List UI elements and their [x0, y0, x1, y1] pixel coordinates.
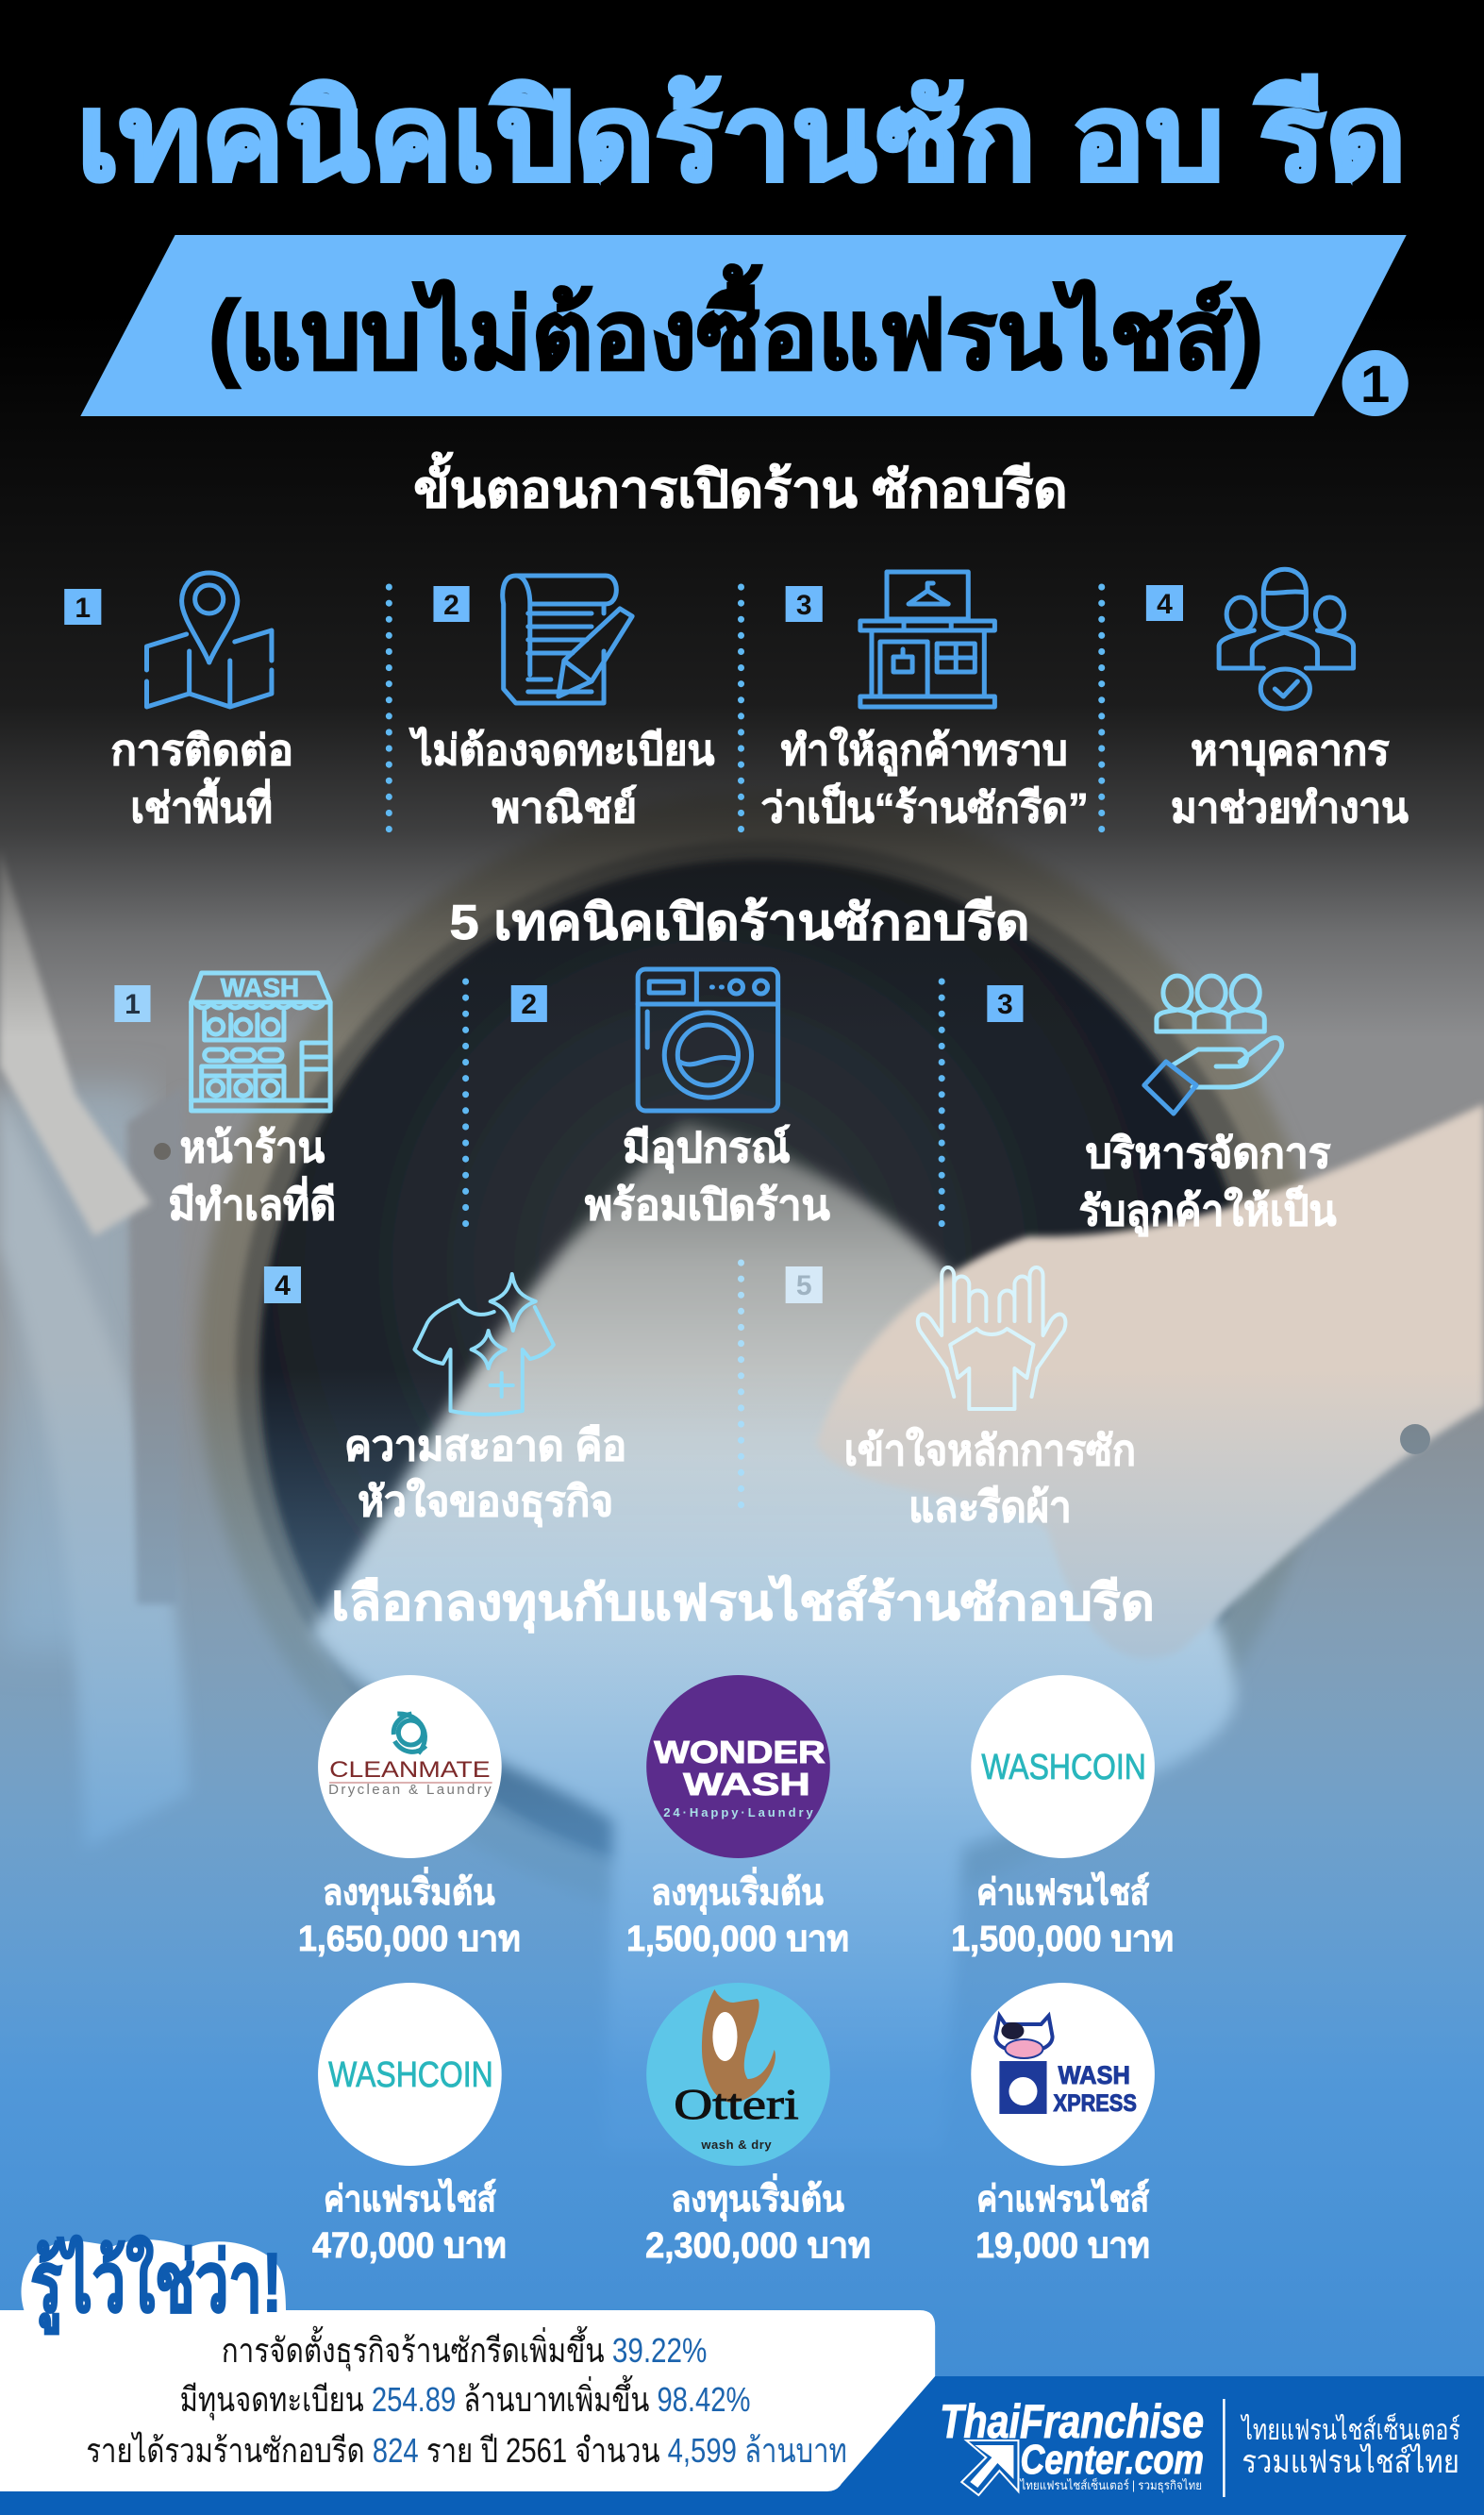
step 3: ว่าเป็น“ร้านซักรีด” — [761, 782, 1089, 831]
dark top overlay — [0, 0, 1484, 1038]
technique 3 — [987, 976, 1337, 1236]
heading: franchise options: เลือกลงทุนกับแฟรนไชส์ร้านซักอบรีด — [331, 1574, 1155, 1634]
franchise: Otteri: ลงทุนเริ่มต้น — [671, 2173, 844, 2222]
logo: ThaiFranchise Center: Center.com — [1020, 2437, 1204, 2483]
step 1: เช่าพื้นที่ — [130, 777, 273, 831]
franchise: Wash Xpress: ค่าแฟรนไชส์ — [976, 2177, 1150, 2220]
icon: washing machine — [638, 969, 778, 1111]
blue bottom overlay — [0, 1368, 1484, 2515]
technique 2: มีอุปกรณ์ — [623, 1124, 791, 1174]
technique 1: WASH — [221, 973, 299, 1002]
franchise: Cleanmate — [298, 1675, 521, 1959]
icon: staff group — [1219, 569, 1354, 709]
icon: document and pen — [503, 576, 632, 703]
franchise: Otteri — [645, 1983, 871, 2266]
technique 1: มีทำเลที่ดี — [169, 1176, 336, 1229]
part number badge — [1342, 350, 1409, 416]
step 3 — [761, 572, 1089, 831]
part number badge: 1 — [1360, 354, 1390, 413]
technique 5: 5 — [796, 1270, 812, 1301]
subtitle band: (แบบไม่ต้องซื้อแฟรนไชส์) — [208, 264, 1263, 389]
icon: shop with hanger — [860, 572, 994, 707]
title: เทคนิคเปิดร้านซัก อบ รีด — [76, 71, 1407, 206]
franchise: Cleanmate: 1,650,000 บาท — [298, 1920, 521, 1959]
franchise: Washcoin 2 — [312, 1983, 507, 2266]
technique 3: รับลูกค้าให้เป็น — [1079, 1185, 1337, 1236]
franchise: Washcoin: WASHCOIN — [981, 1748, 1146, 1787]
technique 1 — [114, 973, 336, 1229]
icon: hands and shirt — [918, 1267, 1065, 1409]
callout heading: รู้ไว้ใช่ว่า! — [30, 2235, 282, 2335]
franchise: Washcoin — [951, 1675, 1174, 1959]
franchise: Washcoin 2: WASHCOIN — [328, 2055, 493, 2095]
panel: opening steps — [64, 569, 1409, 831]
franchise: Otteri: 2,300,000 บาท — [645, 2226, 871, 2266]
step 4: มาช่วยทำงาน — [1171, 785, 1409, 831]
footer tagline — [1241, 2412, 1460, 2480]
franchise: Wash Xpress: XPRESS — [1054, 2090, 1137, 2117]
franchise: Wonder Wash: 1,500,000 บาท — [626, 1920, 849, 1959]
logo: ThaiFranchise Center: ไทยแฟรนไชส์เซ็นเตอร์ | รวมธุรกิจไทย — [1020, 2476, 1202, 2493]
franchise: Washcoin: 1,500,000 บาท — [951, 1920, 1174, 1959]
callout facts: การจัดตั้งธุรกิจร้านซักรีดเพิ่มขึ้น 39.22% — [222, 2325, 707, 2372]
franchise: Washcoin 2: ค่าแฟรนไชส์ — [324, 2177, 496, 2220]
franchise: Otteri: Otteri — [674, 2080, 799, 2128]
franchise: Cleanmate: Dryclean & Laundry — [328, 1782, 492, 1798]
franchise: Cleanmate: ลงทุนเริ่มต้น — [323, 1867, 495, 1915]
technique 3: บริหารจัดการ — [1086, 1131, 1331, 1177]
callout facts: มีทุนจดทะเบียน 254.89 ล้านบาทเพิ่มขึ้น 98.42% — [180, 2374, 751, 2421]
callout facts: รายได้รวมร้านซักอบรีด 824 ราย ปี 2561 จำนวน 4,599 ล้านบาท — [86, 2431, 847, 2470]
icon: map with pin — [146, 573, 272, 707]
technique 4: ความสะอาด คือ — [344, 1423, 626, 1469]
technique 2: 2 — [521, 989, 537, 1020]
franchise: Wonder Wash — [626, 1675, 849, 1959]
logo: ThaiFranchise Center — [940, 2395, 1204, 2495]
callout: did you know — [0, 2235, 935, 2491]
technique 4: 4 — [275, 1270, 291, 1301]
franchise: Washcoin: ค่าแฟรนไชส์ — [976, 1870, 1150, 1913]
step 2: 2 — [443, 590, 459, 621]
technique 5: เข้าใจหลักการซัก — [844, 1426, 1136, 1474]
footer bar — [0, 2376, 1484, 2515]
franchise: Wash Xpress — [971, 1983, 1155, 2266]
franchise: Cleanmate: CLEANMATE — [329, 1757, 491, 1783]
technique 3: 3 — [997, 989, 1013, 1020]
step 4 — [1146, 569, 1409, 831]
icon: hand holding customers — [1144, 976, 1282, 1114]
franchise: Wonder Wash: ลงทุนเริ่มต้น — [651, 1867, 824, 1915]
subtitle band — [80, 235, 1407, 416]
step 3: 3 — [796, 590, 812, 621]
step 1: การติดต่อ — [110, 728, 293, 774]
panel: five techniques — [114, 969, 1337, 1531]
step 1: 1 — [75, 593, 91, 624]
technique 5 — [786, 1266, 1136, 1531]
step 4: หาบุคลากร — [1191, 728, 1390, 777]
technique 2: พร้อมเปิดร้าน — [585, 1182, 830, 1229]
heading: five techniques: 5 เทคนิคเปิดร้านซักอบรีด — [450, 896, 1029, 950]
step 3: ทำให้ลูกค้าทราบ — [781, 726, 1068, 776]
callout facts — [86, 2325, 847, 2470]
franchise: Wash Xpress: WASH — [1059, 2061, 1130, 2089]
franchise: Wonder Wash: 24·Happy·Laundry — [663, 1805, 814, 1819]
logo: ThaiFranchise Center: ThaiFranchise — [940, 2395, 1204, 2448]
step 1 — [64, 573, 293, 831]
franchise: Wonder Wash: WONDER — [654, 1735, 825, 1770]
franchise: Otteri: wash & dry — [700, 2138, 772, 2152]
technique 4: หัวใจของธุรกิจ — [358, 1477, 613, 1528]
step 2: ไม่ต้องจดทะเบียน — [409, 726, 714, 774]
franchise: Washcoin 2: 470,000 บาท — [312, 2226, 507, 2266]
step 2: พาณิชย์ — [492, 784, 637, 831]
icon: laundry shopfront — [192, 973, 330, 1111]
franchise: Wonder Wash: WASH — [683, 1768, 810, 1802]
panel: franchise list — [298, 1675, 1174, 2266]
technique 1: 1 — [125, 989, 141, 1020]
step 4: 4 — [1157, 589, 1173, 620]
technique 1: หน้าร้าน — [180, 1125, 325, 1171]
icon: clean shirt with sparkles — [414, 1274, 554, 1415]
technique 4 — [264, 1266, 626, 1528]
heading: opening steps: ขั้นตอนการเปิดร้าน ซักอบรีด — [413, 452, 1068, 518]
step 2 — [409, 576, 714, 831]
technique 2 — [511, 969, 830, 1229]
technique 5: และรีดผ้า — [909, 1484, 1072, 1531]
franchise: Wash Xpress: 19,000 บาท — [975, 2226, 1150, 2266]
